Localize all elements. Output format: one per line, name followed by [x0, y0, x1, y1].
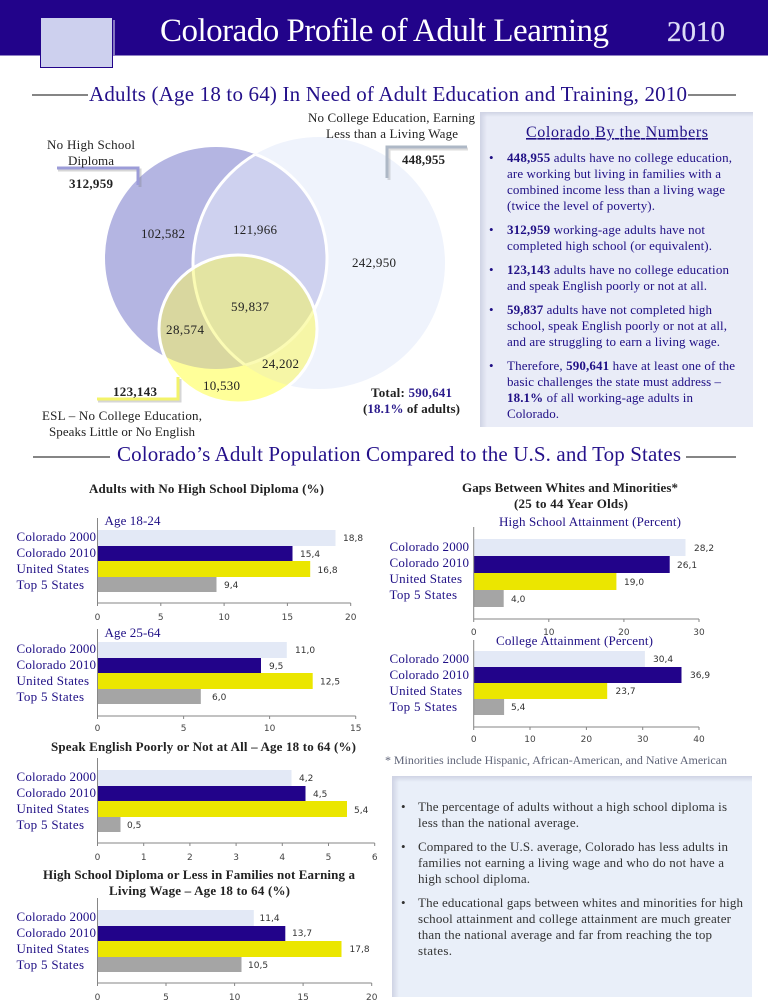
chart: age 25-64: [16, 625, 361, 734]
chart: speak English poorly: 2: [187, 853, 193, 863]
venn region values: [141, 222, 396, 393]
chart: age 25-64: Age 25-64: [104, 625, 161, 640]
takeaway bullet list: families not earning a living wage and who do not have a: [418, 855, 724, 870]
callout: no college education, earning less: 448,955: [402, 152, 446, 167]
venn total: Total: 590,641: [371, 385, 452, 400]
takeaway bullet list: high school diploma.: [418, 871, 530, 886]
takeaway bullet list: •: [401, 799, 406, 814]
callout: no college education, earning less: Less than a Living Wage: [326, 126, 458, 141]
section heading: population compared: Colorado’s Adult Population Compared to the U.S. and Top States: [117, 442, 681, 466]
takeaway bullet list: states.: [418, 943, 452, 958]
chart: college attainment: 30: [637, 735, 649, 745]
chart: speak English poorly: Colorado 2000: [16, 769, 96, 784]
chart: living wage: 10,5: [248, 961, 268, 971]
chart: speak English poorly: 6: [372, 853, 378, 863]
chart: living wage: 11,4: [260, 914, 280, 924]
chart: age 18-24: Age 18-24: [104, 513, 161, 528]
footnote: * Minorities include Hispanic, African-American, and Native American: [385, 753, 727, 767]
chart: age 18-24: 0: [95, 613, 101, 623]
takeaway bullet list: [401, 799, 744, 958]
chart: college attainment: 10: [524, 735, 536, 745]
venn diagram: [105, 137, 445, 403]
venn region values: 59,837: [231, 299, 270, 314]
chart heading: High School Diploma or Less in Families not Earning a: [43, 867, 356, 882]
chart: college attainment: [390, 633, 710, 745]
chart: age 25-64: Top 5 States: [16, 689, 84, 704]
year: 2010: [667, 16, 725, 48]
panel bullet list: Therefore, 590,641 have at least one of the: [507, 358, 735, 373]
callout: ESL: ESL – No College Education,: [42, 408, 202, 423]
chart: high school attainment: High School Attainment (Percent): [499, 514, 681, 529]
callout: no high school diploma: [47, 137, 140, 191]
venn region values: 10,530: [203, 378, 240, 393]
chart: speak English poorly: 4,2: [299, 774, 313, 784]
chart: high school attainment: United States: [390, 571, 462, 586]
chart: speak English poorly: 4: [279, 853, 285, 863]
venn total: [363, 385, 460, 416]
chart: high school attainment: 26,1: [677, 561, 697, 571]
chart heading: Speak English Poorly or Not at All – Age 18 to 64 (%): [51, 739, 356, 754]
chart: age 18-24: 16,8: [318, 566, 338, 576]
panel bullet list: •: [489, 358, 494, 373]
chart: speak English poorly: 0,5: [127, 821, 141, 831]
panel bullet list: (twice the level of poverty).: [507, 198, 655, 213]
chart: age 25-64: 9,5: [269, 662, 283, 672]
chart: speak English poorly: [16, 739, 378, 863]
heading: adults with no high school diploma: Adults with No High School Diploma (%): [89, 481, 324, 496]
callout: no college education, earning less: [308, 110, 476, 180]
chart: age 25-64: Colorado 2010: [16, 657, 96, 672]
chart: living wage: 15: [297, 993, 309, 1003]
chart: college attainment: United States: [390, 683, 462, 698]
takeaway bullet list: school attainment and college attainment are much greater: [418, 911, 732, 926]
chart: speak English poorly: 5,4: [354, 806, 369, 816]
panel bullet list: 448,955 adults have no college education,: [507, 150, 732, 165]
chart: college attainment: Colorado 2000: [390, 651, 469, 666]
chart: high school attainment: 0: [471, 628, 477, 638]
chart: speak English poorly: 0: [95, 853, 101, 863]
chart: living wage: 20: [366, 993, 378, 1003]
venn region values: 28,574: [166, 322, 204, 337]
panel bullet list: •: [489, 262, 494, 277]
venn region values: 242,950: [352, 255, 396, 270]
chart: high school attainment: Colorado 2000: [390, 539, 469, 554]
panel bullet list: 312,959 working-age adults have not: [507, 222, 705, 237]
header band: [0, 0, 768, 68]
venn total: (18.1% of adults): [363, 401, 460, 416]
chart: living wage: United States: [16, 941, 89, 956]
chart: living wage: 0: [95, 993, 101, 1003]
venn region values: 102,582: [141, 226, 185, 241]
panel bullet list: •: [489, 222, 494, 237]
chart: age 18-24: Top 5 States: [16, 577, 84, 592]
chart: age 25-64: 11,0: [295, 646, 315, 656]
chart: high school attainment: [390, 514, 714, 638]
panel bullet list: completed high school (or equivalent).: [507, 238, 712, 253]
chart: college attainment: 23,7: [616, 687, 636, 697]
chart: age 25-64: Colorado 2000: [16, 641, 96, 656]
callout: ESL: Speaks Little or No English: [49, 424, 196, 439]
chart: speak English poorly: 4,5: [313, 790, 327, 800]
chart: age 25-64: 0: [95, 724, 101, 734]
venn region values: 24,202: [262, 356, 299, 371]
panel bullet list: school, speak English poorly or not at all,: [507, 318, 727, 333]
chart: speak English poorly: United States: [16, 801, 89, 816]
chart: college attainment: College Attainment (Percent): [496, 633, 653, 648]
takeaway bullet list: Compared to the U.S. average, Colorado has less adults in: [418, 839, 728, 854]
chart: high school attainment: Top 5 States: [390, 587, 457, 602]
takeaway bullet list: than the national average and far from reaching the top: [418, 927, 712, 942]
chart: college attainment: 30,4: [653, 655, 673, 665]
heading: gaps between whites and minorities: [462, 480, 678, 511]
panel bullet list: and are struggling to earn a living wage.: [507, 334, 720, 349]
panel heading: Colorado By the Numbers: [526, 124, 708, 141]
chart: age 18-24: Colorado 2000: [16, 529, 96, 544]
chart: college attainment: 40: [693, 735, 705, 745]
panel bullet list: and speak English poorly or not at all.: [507, 278, 707, 293]
panel bullet list: 59,837 adults have not completed high: [507, 302, 712, 317]
heading: gaps between whites and minorities: Gaps Between Whites and Minorities*: [462, 480, 678, 495]
callout: ESL: 123,143: [113, 384, 158, 399]
chart: speak English poorly: 5: [326, 853, 331, 863]
chart: college attainment: Top 5 States: [390, 699, 457, 714]
chart: high school attainment: 19,0: [624, 578, 644, 588]
chart: age 18-24: Colorado 2010: [16, 545, 96, 560]
takeaway bullet list: The percentage of adults without a high school diploma is: [418, 799, 727, 814]
takeaway bullet list: The educational gaps between whites and minorities for high: [418, 895, 744, 910]
chart: speak English poorly: Top 5 States: [16, 817, 84, 832]
chart: college attainment: 36,9: [690, 671, 710, 681]
chart: living wage: 13,7: [292, 929, 312, 939]
heading: gaps between whites and minorities: (25 to 44 Year Olds): [514, 496, 628, 511]
chart: age 18-24: 5: [158, 613, 164, 623]
chart: living wage: 10: [229, 993, 241, 1003]
panel bullet list: are working but living in families with a: [507, 166, 721, 181]
takeaway bullet list: •: [401, 895, 406, 910]
panel bullet list: 123,143 adults have no college education: [507, 262, 730, 277]
callout: ESL: [42, 377, 202, 439]
chart: high school attainment: Colorado 2010: [390, 555, 469, 570]
chart: age 25-64: United States: [16, 673, 89, 688]
panel bullet list: Colorado.: [507, 406, 559, 421]
chart: living wage: Top 5 States: [16, 957, 84, 972]
panel bullet list: basic challenges the state must address –: [507, 374, 722, 389]
chart: college attainment: Colorado 2010: [390, 667, 469, 682]
callout: no college education, earning less: No College Education, Earning: [308, 110, 476, 125]
section heading: adults in need: Adults (Age 18 to 64) In Need of Adult Education and Training, 2010: [89, 82, 687, 106]
callout: no high school diploma: No High School: [47, 137, 135, 152]
panel bullet list: 18.1% of all working-age adults in: [507, 390, 694, 405]
chart: age 18-24: 20: [345, 613, 357, 623]
chart: speak English poorly: 3: [233, 853, 239, 863]
chart: living wage: 17,8: [350, 945, 370, 955]
chart: age 18-24: United States: [16, 561, 89, 576]
chart: college attainment: 5,4: [511, 703, 526, 713]
chart: high school attainment: 20: [618, 628, 630, 638]
chart: college attainment: 0: [471, 735, 477, 745]
chart: age 25-64: 15: [350, 724, 361, 734]
chart: age 18-24: 9,4: [224, 581, 239, 591]
panel bullet list: •: [489, 302, 494, 317]
chart: age 18-24: [16, 513, 363, 623]
chart: high school attainment: 28,2: [694, 544, 714, 554]
logo placeholder square: [40, 18, 112, 68]
chart: age 25-64: 12,5: [320, 678, 340, 688]
callout: no high school diploma: Diploma: [68, 153, 114, 168]
chart: college attainment: 20: [581, 735, 592, 745]
chart: age 18-24: 10: [218, 613, 230, 623]
takeaway bullet list: •: [401, 839, 406, 854]
title: Colorado Profile of Adult Learning: [160, 13, 609, 49]
panel: Colorado by the numbers: [480, 112, 753, 427]
chart: age 25-64: 10: [264, 724, 276, 734]
chart: living wage: Colorado 2000: [16, 909, 96, 924]
takeaway bullet list: less than the national average.: [418, 815, 579, 830]
panel bullet list: combined income less than a living wage: [507, 182, 725, 197]
chart: high school attainment: 30: [693, 628, 705, 638]
chart: age 18-24: 18,8: [343, 534, 363, 544]
chart: age 25-64: 5: [181, 724, 186, 734]
panel bullet list: •: [489, 150, 494, 165]
chart: age 25-64: 6,0: [212, 693, 227, 703]
venn region values: 121,966: [233, 222, 278, 237]
panel bullet list: [489, 150, 735, 421]
chart: living wage: 5: [163, 993, 169, 1003]
chart: living wage: Colorado 2010: [16, 925, 96, 940]
chart: age 18-24: 15,4: [300, 550, 320, 560]
panel: key takeaways: [392, 776, 752, 997]
chart: speak English poorly: 1: [141, 853, 147, 863]
chart: age 18-24: 15: [282, 613, 293, 623]
chart: living wage: [16, 867, 378, 1003]
callout: no high school diploma: 312,959: [69, 176, 114, 191]
chart: living wage: Living Wage – Age 18 to 64 (%): [109, 883, 290, 898]
chart: high school attainment: 10: [543, 628, 555, 638]
chart: speak English poorly: Colorado 2010: [16, 785, 96, 800]
chart: high school attainment: 4,0: [511, 595, 526, 605]
